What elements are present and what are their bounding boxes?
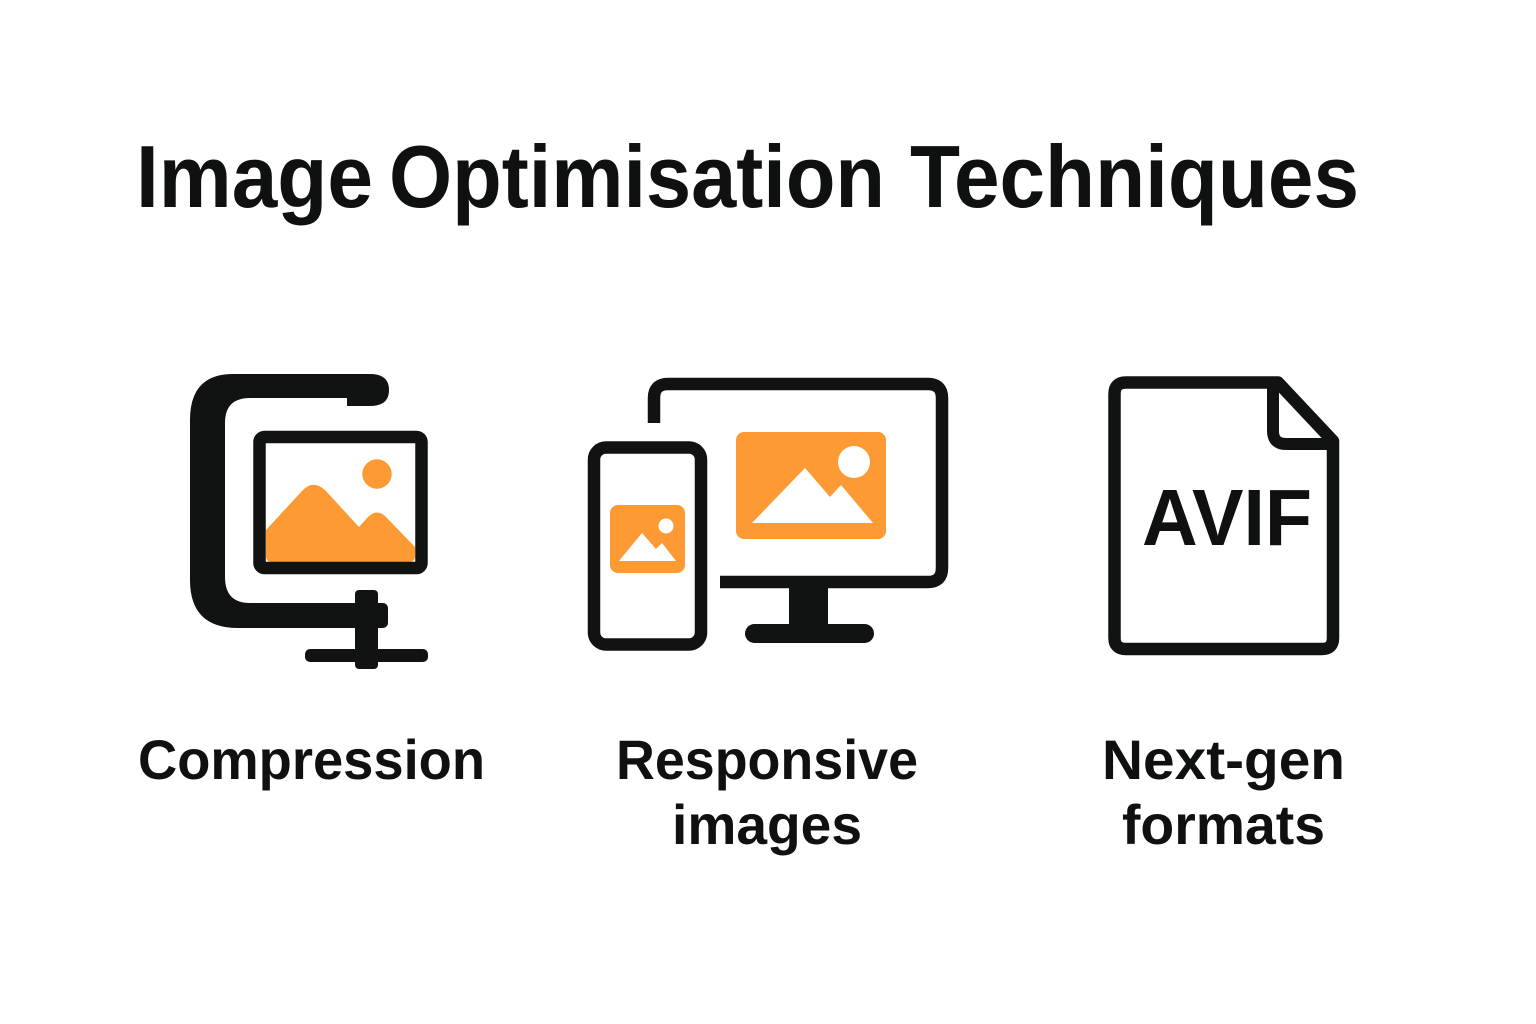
phone [594,448,701,644]
title: Techniques [910,127,1359,226]
label: responsive images: Responsive [616,728,918,791]
title [136,127,1359,226]
label: responsive images [616,728,918,856]
icon: AVIF file [1114,382,1333,649]
title: Optimisation [389,127,885,226]
clamp screw [305,590,428,669]
title: Image [136,127,373,226]
AVIF label: AVIF [1142,473,1312,562]
icon: responsive devices [594,384,942,644]
icon: clamp compressing image [190,374,428,669]
label: next-gen formats: Next-gen [1102,728,1345,791]
label: compression: Compression [138,728,485,791]
monitor [654,384,942,643]
phone image [610,505,685,573]
label: responsive images: images [672,793,862,856]
desktop image [736,432,886,539]
label: next-gen formats: formats [1122,793,1325,856]
label: next-gen formats [1102,728,1345,856]
clamp body [190,374,389,628]
image frame [260,437,422,568]
